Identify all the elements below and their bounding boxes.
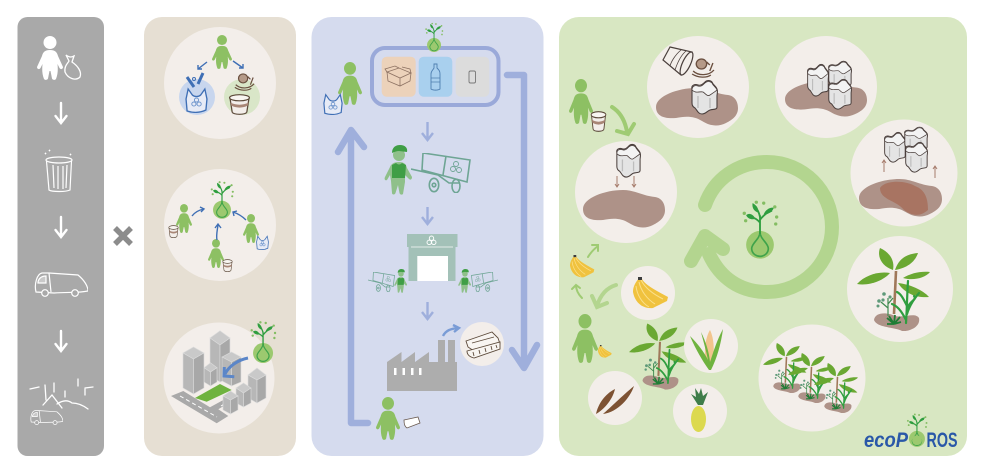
arrow: bananas to person <box>592 285 616 307</box>
person with bucket <box>569 79 606 131</box>
icon: central seedling <box>743 201 778 259</box>
circle: egg carton <box>460 322 504 366</box>
box: cardboard <box>382 57 416 97</box>
buildings <box>183 331 266 414</box>
icon: landfill <box>30 379 93 425</box>
road map <box>171 391 228 423</box>
circle: plant row <box>758 324 866 432</box>
logo: ecoporos: ecoP <box>864 429 909 452</box>
logo: ecoporos <box>864 414 958 452</box>
circle: pineapple <box>673 384 727 438</box>
panel: community solution <box>144 17 296 456</box>
circle: community to seedling <box>164 169 276 281</box>
circle: mould placed on soil <box>575 141 677 243</box>
frame: collection point <box>372 48 498 105</box>
arrow: down 1 <box>422 122 433 140</box>
arrow: to landfill <box>56 331 66 351</box>
arrow: down 3 <box>422 302 433 319</box>
circle: corn <box>684 319 738 373</box>
sorting warehouse <box>407 234 458 281</box>
right small cart and worker <box>458 269 498 293</box>
arrow: cycle ring <box>691 162 832 292</box>
icon: seedling <box>251 321 276 363</box>
person with recycling bag <box>324 62 362 114</box>
icon: person with rubbish bag <box>37 36 81 80</box>
panel: current waste path <box>18 17 104 456</box>
left small cart and worker <box>368 269 407 293</box>
circle: city planting <box>164 321 276 434</box>
logo: ecoporos: O <box>912 432 923 448</box>
icon: seedling logo <box>425 23 443 52</box>
arrow: up left small <box>572 285 582 298</box>
arrow: up right small <box>588 245 598 257</box>
circle: separating waste at home <box>164 27 276 139</box>
circle: bananas <box>621 266 675 320</box>
arrow: down 2 <box>422 207 433 224</box>
box: plastic bottle <box>419 57 452 97</box>
person with bananas <box>572 314 612 363</box>
arrow: big loop down <box>507 75 537 368</box>
circle: single plant <box>847 236 953 342</box>
icon: small banana <box>570 255 594 277</box>
arrow: to truck <box>56 217 66 237</box>
circle: moulds in soil <box>775 36 877 138</box>
arrow: factory to product <box>443 325 459 336</box>
icon: garbage truck <box>35 273 88 296</box>
arrow: big loop up <box>338 130 368 423</box>
box: can <box>456 57 489 97</box>
green park <box>195 384 232 402</box>
circle: filling mould <box>647 36 749 138</box>
panel: soil and planting cycle <box>559 17 967 456</box>
icon: multiplication cross <box>115 228 131 244</box>
person with carton <box>376 397 420 440</box>
plant cluster <box>629 324 687 390</box>
factory <box>387 340 457 391</box>
arrow: planted into city <box>224 358 248 377</box>
panel: recycling loop <box>312 17 544 456</box>
circle: moulds removed <box>850 120 958 226</box>
arrow: to mould <box>612 107 634 134</box>
logo: ecoporos: ROS <box>926 429 958 452</box>
icon: rubbish bin <box>45 150 72 192</box>
circle: cassava <box>588 371 642 425</box>
worker with cart <box>385 145 470 195</box>
arrow: to bin <box>56 103 66 123</box>
